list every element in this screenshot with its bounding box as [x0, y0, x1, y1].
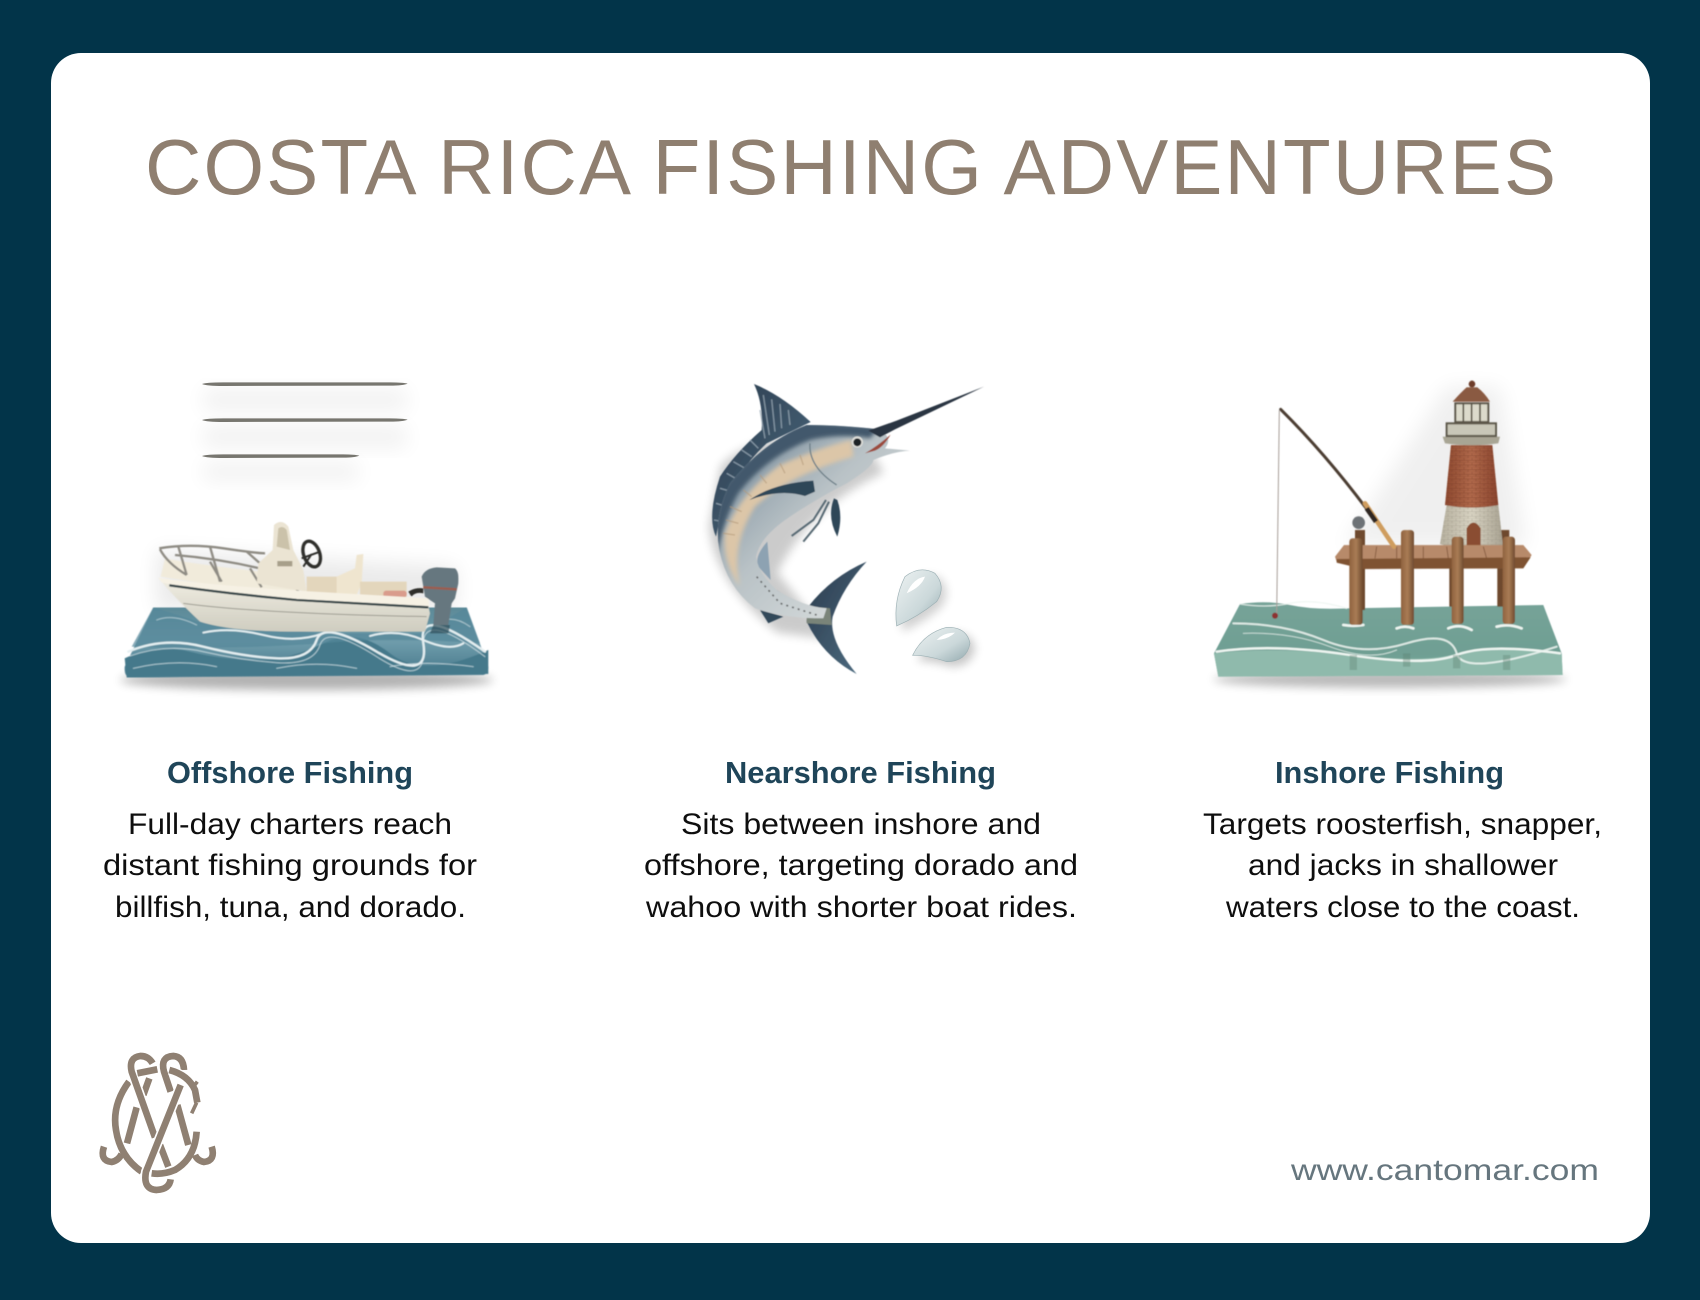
dorsal fin [712, 384, 811, 537]
body [718, 425, 910, 618]
eye [852, 436, 863, 448]
outboard motor [408, 588, 423, 597]
railing [159, 546, 298, 592]
icon: marlin [709, 384, 984, 674]
text block: inshore description: waters close to the coast. [1225, 891, 1580, 924]
fishing rod [1281, 409, 1370, 513]
back shading [715, 422, 880, 557]
icon: pier, lighthouse and rod [1213, 381, 1567, 688]
heading: nearshore fishing: Nearshore Fishing [725, 755, 996, 790]
panel: offshore text [103, 755, 477, 924]
icon: monogram logo [103, 1056, 213, 1190]
hull [158, 578, 430, 632]
text block: nearshore description: offshore, targeting dorado and [644, 849, 1078, 882]
bulwark [161, 558, 303, 593]
text block: inshore description: and jacks in shallower [1248, 849, 1558, 882]
text block: offshore description: distant fishing grounds for [103, 849, 477, 882]
bill [868, 387, 984, 437]
panel: inshore text [1203, 755, 1602, 924]
panel: inshore illustration [1213, 381, 1567, 688]
text block: nearshore description: wahoo with shorter boat rides. [645, 891, 1077, 924]
icon: speed lines [202, 382, 408, 482]
text block: nearshore description [644, 808, 1078, 924]
pectoral fin [749, 481, 815, 500]
text block: inshore description: Targets roosterfish, snapper, [1203, 808, 1602, 841]
text block: nearshore description: Sits between inshore and [681, 808, 1041, 841]
tail [807, 562, 867, 674]
lighthouse [1440, 381, 1503, 550]
icon: water drops [896, 570, 975, 667]
water slab [125, 607, 488, 677]
beige stripe [724, 440, 853, 587]
title: COSTA RICA FISHING ADVENTURES [145, 123, 1556, 211]
console [257, 522, 307, 592]
back posts [1355, 530, 1365, 610]
website url: www.cantomar.com [1290, 1154, 1599, 1187]
text block: offshore description [103, 808, 477, 924]
panel: nearshore illustration [709, 384, 984, 674]
panel: offshore illustration [120, 382, 493, 690]
panel: nearshore text [644, 755, 1078, 924]
ventral fins [792, 500, 829, 542]
heading: offshore fishing: Offshore Fishing [167, 755, 413, 790]
dock deck [1335, 545, 1532, 568]
water slab [1214, 602, 1563, 677]
front posts [1349, 538, 1363, 625]
heading: inshore fishing: Inshore Fishing [1275, 755, 1504, 790]
steering wheel [300, 539, 324, 569]
seat [337, 554, 363, 595]
icon: boat on water [120, 522, 493, 690]
gill [810, 443, 837, 485]
text block: offshore description: Full-day charters reach [128, 808, 452, 841]
text block: inshore description [1203, 808, 1602, 924]
mouth [865, 435, 891, 453]
text block: offshore description: billfish, tuna, and dorado. [115, 891, 466, 924]
anal fin and second dorsal [757, 542, 771, 580]
